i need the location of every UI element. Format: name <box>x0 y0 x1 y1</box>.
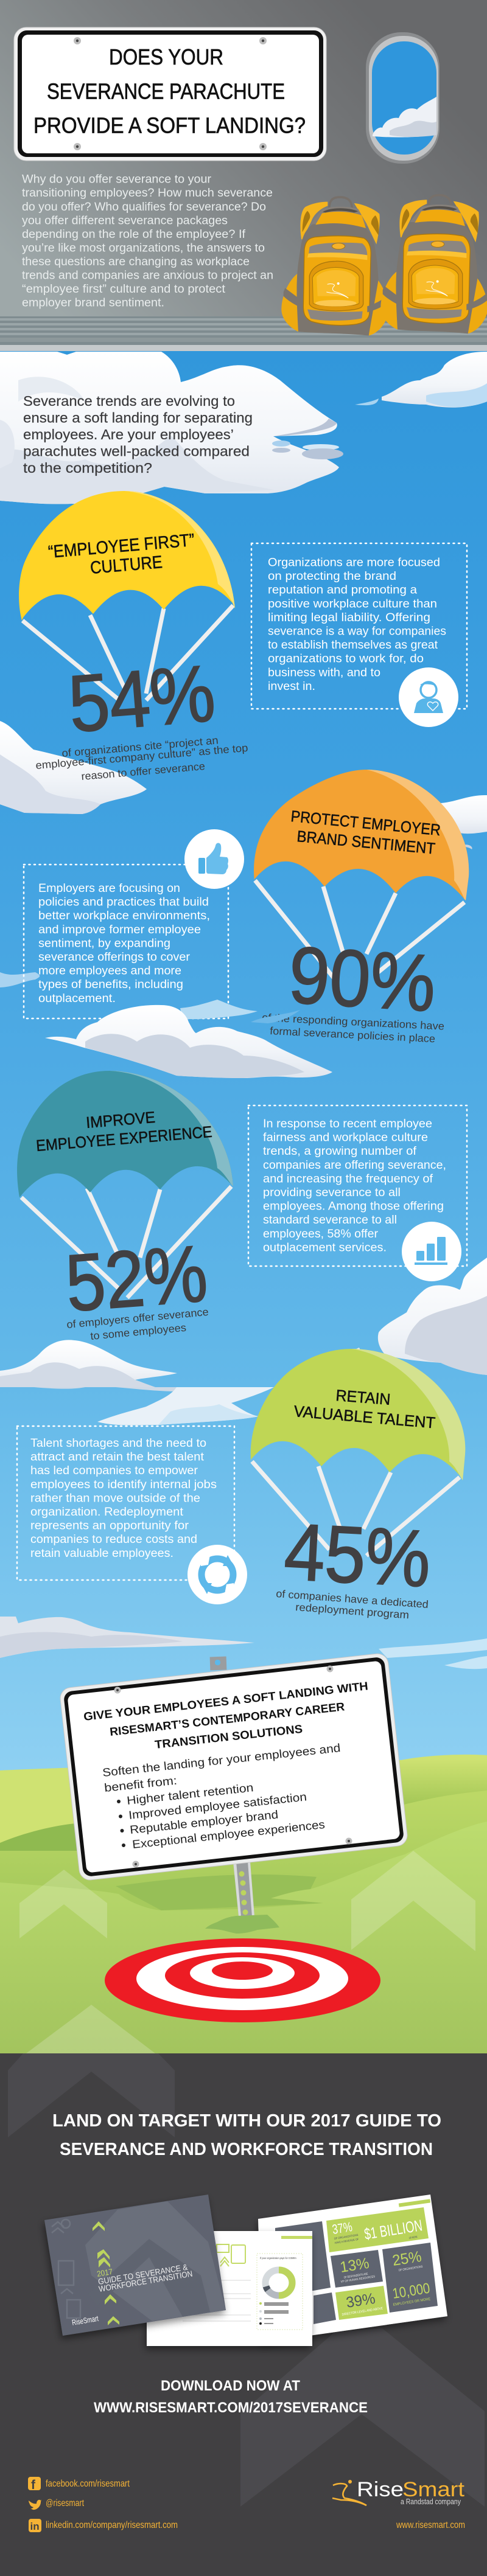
report mockup: spread page: OF RESPONDENTS ARE <box>343 2272 368 2280</box>
footer chevrons <box>8 2053 485 2507</box>
caption: of the responding organizations have <box>262 1011 444 1032</box>
green director panel: 39% <box>345 2290 376 2311</box>
website: www.risesmart.com <box>396 2520 465 2530</box>
caption: formal severance policies in place <box>270 1025 435 1045</box>
sign body: Higher talent retention <box>126 1781 254 1808</box>
strings <box>21 1186 231 1298</box>
panel stats: 13% <box>339 2255 370 2276</box>
body text: and increasing the frequency of <box>263 1172 433 1185</box>
body text: severance is a way for companies <box>268 625 446 638</box>
canopy title: IMPROVE <box>85 1108 156 1132</box>
caption: to some employees <box>90 1321 187 1342</box>
sign body: Reputable employer brand <box>129 1808 279 1837</box>
social: facebook <box>28 2477 130 2492</box>
intro paragraph: employer brand sentiment. <box>22 297 164 310</box>
donut chart <box>265 2270 292 2296</box>
body text: represents an opportunity for <box>30 1520 189 1533</box>
intro paragraph: “employee first” culture and to protect <box>22 283 226 296</box>
parachute 1: employee first culture <box>19 491 248 782</box>
panel: sky background <box>0 351 487 1775</box>
footer heading: LAND ON TARGET WITH OUR 2017 GUIDE TO <box>52 2111 441 2131</box>
green revenue panel: $1 BILLION <box>363 2216 424 2243</box>
body text: positive workplace culture than <box>268 597 437 610</box>
cover title: RiseSmart <box>71 2314 99 2327</box>
strings <box>255 880 464 978</box>
social: linkedin: linkedin.com/company/risesmart.com <box>46 2520 178 2530</box>
panel stats <box>339 2248 431 2307</box>
canopy <box>254 770 469 900</box>
intro paragraph: you offer different severance packages <box>22 214 228 227</box>
canopy title <box>293 1386 436 1432</box>
cover title <box>71 2263 193 2327</box>
social: facebook: f <box>31 2478 36 2492</box>
canopy title <box>47 531 195 578</box>
body text: outplacement. <box>38 992 116 1005</box>
trend intro text: to the competition? <box>23 460 152 476</box>
sign body: Soften the landing for your employees and <box>102 1742 341 1780</box>
icon: right backpack <box>380 195 487 333</box>
caption <box>276 1587 429 1621</box>
caption <box>262 1011 444 1045</box>
faded cover icons <box>52 2219 80 2318</box>
canopy title <box>290 807 441 858</box>
ground: rolling hills <box>0 1755 487 2053</box>
statistic: 45% <box>282 1506 433 1604</box>
body text: companies are offering severance, <box>263 1159 446 1172</box>
body text: rather than move outside of the <box>30 1492 200 1505</box>
report mockup: spread page <box>258 2195 447 2342</box>
call to action sign <box>59 1652 408 1881</box>
cloud: left lower <box>0 1340 177 1387</box>
screws <box>114 1666 352 1868</box>
gray panels <box>275 2221 438 2324</box>
top bracket <box>210 1657 226 1670</box>
body text: limiting legal liability. Offering <box>268 611 430 624</box>
social: twitter <box>29 2498 84 2510</box>
cloud: top left <box>0 352 343 504</box>
canopy <box>251 1349 465 1480</box>
logo: RiseSmart <box>332 2478 465 2506</box>
green director panel <box>335 2286 388 2320</box>
table lines <box>183 2280 251 2321</box>
icon: thumbs up <box>184 829 244 889</box>
caption: employee-first company culture” as the top <box>35 742 248 771</box>
cloud: right edge behind orange parachute <box>441 795 487 849</box>
body text: In response to recent employee <box>263 1118 432 1130</box>
cloud: lower left band <box>0 1617 254 1658</box>
report mockup: spread page: VP OF HUMAN RESOURCES <box>340 2275 376 2284</box>
canopy title <box>35 1108 213 1155</box>
panel stats: EMPLOYEES OR MORE <box>393 2297 431 2307</box>
trend intro text: ensure a soft landing for separating <box>23 410 253 426</box>
social: linkedin: in <box>30 2521 40 2532</box>
body text: employees. Among those offering <box>263 1200 444 1213</box>
cloud: right lower <box>378 1258 487 1375</box>
trend intro text: employees. Are your employees’ <box>23 426 234 442</box>
intro paragraph: Why do you offer severance to your <box>22 173 212 186</box>
footer heading <box>52 2111 441 2159</box>
download call to action <box>94 2378 368 2416</box>
icon: cycle arrows <box>187 1545 247 1604</box>
legend rows <box>259 2302 289 2325</box>
icon: airplane window <box>366 32 440 164</box>
body text: trends, a growing number of <box>263 1145 417 1158</box>
intro paragraph: transitioning employees? How much severance <box>22 187 273 200</box>
body text: and improve former employee <box>38 924 201 936</box>
green revenue panel: 37% <box>331 2219 353 2237</box>
canopy title: VALUABLE TALENT <box>293 1402 436 1432</box>
social: twitter: @risesmart <box>46 2498 84 2508</box>
report mockup: cover <box>44 2195 226 2336</box>
statistic: 52% <box>63 1228 210 1328</box>
icon: employee with heart <box>399 667 458 727</box>
caption <box>66 1306 209 1342</box>
dashed survey box <box>257 2254 303 2330</box>
body text: attract and retain the best talent <box>30 1451 205 1464</box>
logo: RiseSmart: a Randstad company <box>401 2497 461 2506</box>
body text: invest in. <box>268 680 315 693</box>
strings <box>23 605 233 700</box>
social: facebook: facebook.com/risesmart <box>46 2479 130 2489</box>
sign heading: TRANSITION SOLUTIONS <box>154 1723 303 1752</box>
caption: of organizations cite “project an <box>61 734 219 759</box>
intro paragraph <box>22 173 273 310</box>
sign heading: RISESMART’S CONTEMPORARY CAREER <box>109 1701 346 1739</box>
sign heading <box>83 1680 369 1752</box>
target <box>105 1938 380 2022</box>
sign body: Improved employee satisfaction <box>128 1791 307 1822</box>
download call to action: DOWNLOAD NOW AT <box>161 2378 300 2394</box>
download call to action: WWW.RISESMART.COM/2017SEVERANCE <box>94 2400 368 2416</box>
cloud: lower right wisps <box>379 1638 487 1669</box>
sign body: benefit from: <box>103 1775 178 1795</box>
sign body <box>102 1742 341 1851</box>
canopy title: RETAIN <box>335 1386 391 1408</box>
caption: of companies have a dedicated <box>276 1587 429 1610</box>
body text <box>38 882 210 1005</box>
strings <box>252 1461 460 1556</box>
logo runner <box>332 2484 366 2505</box>
cover title: 2017 <box>96 2267 113 2278</box>
canopy title: EMPLOYEE EXPERIENCE <box>35 1123 213 1155</box>
body text: standard severance to all <box>263 1214 397 1227</box>
green revenue panel: OR MORE <box>408 2235 418 2240</box>
intro paragraph: depending on the role of the employee? If <box>22 228 246 241</box>
panel stats: 10,000 <box>391 2280 431 2302</box>
report mockup: spread page: OF ORGANIZATIONS <box>398 2265 423 2272</box>
body text: companies to reduce costs and <box>30 1533 197 1546</box>
body text: types of benefits, including <box>38 978 183 991</box>
caption: reason to offer severance <box>81 760 206 782</box>
floor stripes <box>0 316 487 351</box>
icon: bar chart <box>402 1222 461 1281</box>
green revenue panel: OF ORGANIZATIONS <box>334 2233 359 2240</box>
icon: calculator <box>217 2244 245 2266</box>
green director panel: DIRECTOR LEVEL AND ABOVE <box>342 2306 384 2317</box>
green revenue panel <box>326 2207 429 2252</box>
parachute 4: retain valuable talent <box>251 1349 465 1621</box>
title text: DOES YOUR <box>109 44 223 69</box>
body text: to establish themselves as great <box>268 639 438 652</box>
intro paragraph: do you offer? Who qualifies for severance? Do <box>22 201 266 214</box>
statistic: 90% <box>286 930 438 1028</box>
intro paragraph: these questions are changing as workplace <box>22 256 250 268</box>
body text: outplacement services. <box>263 1241 387 1254</box>
panel: employee first details <box>251 543 467 727</box>
chevrons on the ground <box>19 1851 475 2053</box>
title text: SEVERANCE PARACHUTE <box>47 79 285 103</box>
caption <box>35 734 248 782</box>
lime chevrons <box>93 2221 119 2325</box>
green revenue panel: HAVE A REVENUE OF <box>334 2238 359 2244</box>
sign post <box>205 1657 279 1934</box>
social: linkedin <box>29 2519 178 2532</box>
cloud: left middle <box>0 721 147 814</box>
intro paragraph: you’re like most organizations, the answers to <box>22 242 265 254</box>
title sign <box>14 27 326 161</box>
panel: download footer background <box>0 2053 487 2576</box>
parachute 2: protect employer brand sentiment <box>254 770 469 1045</box>
logo: RiseSmart: Smart <box>402 2478 465 2501</box>
panel: brand sentiment details <box>24 829 244 1018</box>
body text: employees, 58% offer <box>263 1228 379 1241</box>
body text: reputation and promoting a <box>268 584 417 597</box>
body text: Organizations are more focused <box>268 556 440 569</box>
panel: intro header background <box>0 0 487 351</box>
body text: better workplace environments, <box>38 910 210 922</box>
report mockup: middle page <box>147 2231 312 2346</box>
statistic: 54% <box>65 648 218 749</box>
body text: on protecting the brand <box>268 570 396 583</box>
cloud: top right <box>355 352 487 408</box>
body text: Employers are focusing on <box>38 882 180 895</box>
title text: PROVIDE A SOFT LANDING? <box>33 113 306 138</box>
intro paragraph: trends and companies are anxious to project an <box>22 269 273 282</box>
body text <box>30 1437 217 1560</box>
icon: left backpack <box>281 197 388 336</box>
logo: RiseSmart: Rise <box>357 2478 404 2501</box>
sign heading: GIVE YOUR EMPLOYEES A SOFT LANDING WITH <box>83 1680 369 1724</box>
canopy title: PROTECT EMPLOYER <box>290 807 441 839</box>
trend intro text: parachutes well-packed compared <box>23 443 250 459</box>
cloud: small behind green parachute <box>304 1348 365 1372</box>
footer heading: SEVERANCE AND WORKFORCE TRANSITION <box>60 2140 433 2159</box>
cloud: wisps above redeployment panel <box>34 1387 274 1426</box>
body text: has led companies to empower <box>30 1464 198 1477</box>
body text: retain valuable employees. <box>30 1547 173 1560</box>
body text: providing severance to all <box>263 1186 401 1199</box>
body text: employees to identify internal jobs <box>30 1478 217 1491</box>
cloud: center <box>45 1000 332 1078</box>
body text <box>263 1118 446 1254</box>
parachute 3: improve employee experience <box>17 1071 233 1342</box>
canopy title: CULTURE <box>89 552 163 578</box>
body text: fairness and workplace culture <box>263 1132 428 1144</box>
sign body: Exceptional employee experiences <box>131 1819 326 1851</box>
panel stats: 25% <box>391 2248 422 2269</box>
body text: severance offerings to cover <box>38 951 191 964</box>
cover title: WORKFORCE TRANSITION <box>98 2269 193 2294</box>
body text: organizations to work for, do <box>268 653 424 666</box>
body text: organization. Redeployment <box>30 1506 184 1519</box>
body text: Talent shortages and the need to <box>30 1437 206 1450</box>
title text <box>33 44 306 138</box>
canopy title: BRAND SENTIMENT <box>296 827 436 858</box>
panel: employee experience details <box>248 1105 467 1281</box>
cloud: wisp left <box>0 972 40 987</box>
mound <box>205 1915 279 1934</box>
body text: sentiment, by expanding <box>38 937 170 950</box>
caption: redeployment program <box>295 1601 410 1621</box>
canopy title: “EMPLOYEE FIRST” <box>47 531 195 562</box>
canopy <box>17 1071 233 1197</box>
body text: business with, and to <box>268 666 380 679</box>
trend intro text <box>23 393 253 476</box>
trend intro text: Severance trends are evolving to <box>23 393 235 409</box>
panel: retain talent details <box>17 1426 247 1604</box>
cover title: GUIDE TO SEVERANCE & <box>97 2263 188 2286</box>
caption: of employers offer severance <box>66 1306 209 1331</box>
body text: more employees and more <box>38 965 181 978</box>
body text <box>268 556 446 693</box>
canopy <box>19 491 235 621</box>
body text: policies and practices that build <box>38 896 209 909</box>
report mockup: middle page: If your organization pays for COBRA <box>260 2257 296 2260</box>
